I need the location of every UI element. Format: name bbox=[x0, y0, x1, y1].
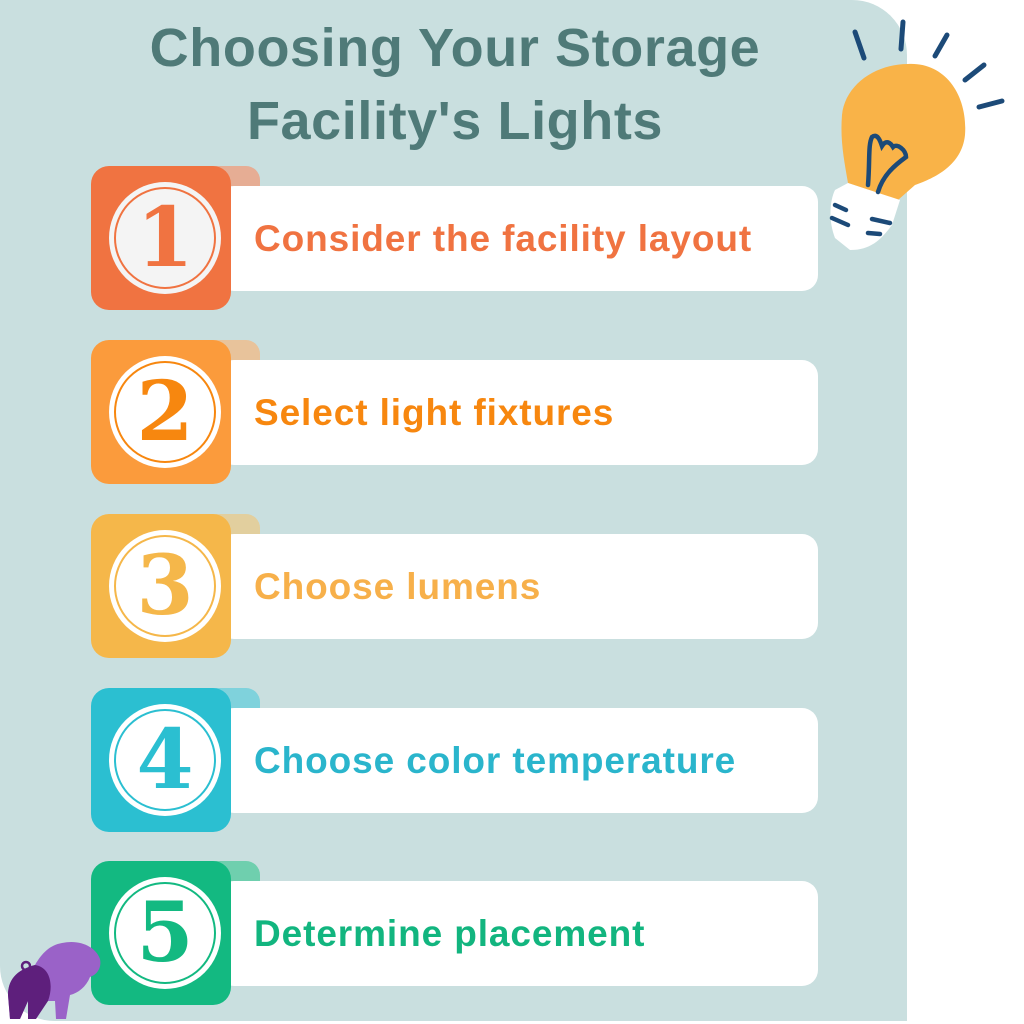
step 3: 3 bbox=[136, 538, 194, 634]
step 5 bbox=[91, 861, 818, 1005]
step 4: 4 bbox=[136, 712, 194, 808]
step 3 bbox=[91, 514, 818, 658]
step 1 bbox=[91, 166, 818, 310]
icon: light bulb bbox=[830, 20, 1004, 250]
step 1: Consider the facility layout bbox=[254, 218, 752, 259]
step 4 bbox=[91, 688, 818, 832]
icon: purple pug mascot bbox=[8, 942, 100, 1019]
title: Choosing Your Storage bbox=[150, 18, 760, 78]
step 4: Choose color temperature bbox=[254, 740, 736, 781]
step 2 bbox=[91, 340, 818, 484]
title: Facility's Lights bbox=[247, 91, 663, 151]
step 5: Determine placement bbox=[254, 913, 645, 954]
title bbox=[150, 18, 760, 151]
step 2: 2 bbox=[136, 364, 194, 460]
step 1: 1 bbox=[136, 190, 194, 286]
step 5: 5 bbox=[136, 885, 194, 981]
step 2: Select light fixtures bbox=[254, 392, 614, 433]
step 3: Choose lumens bbox=[254, 566, 541, 607]
